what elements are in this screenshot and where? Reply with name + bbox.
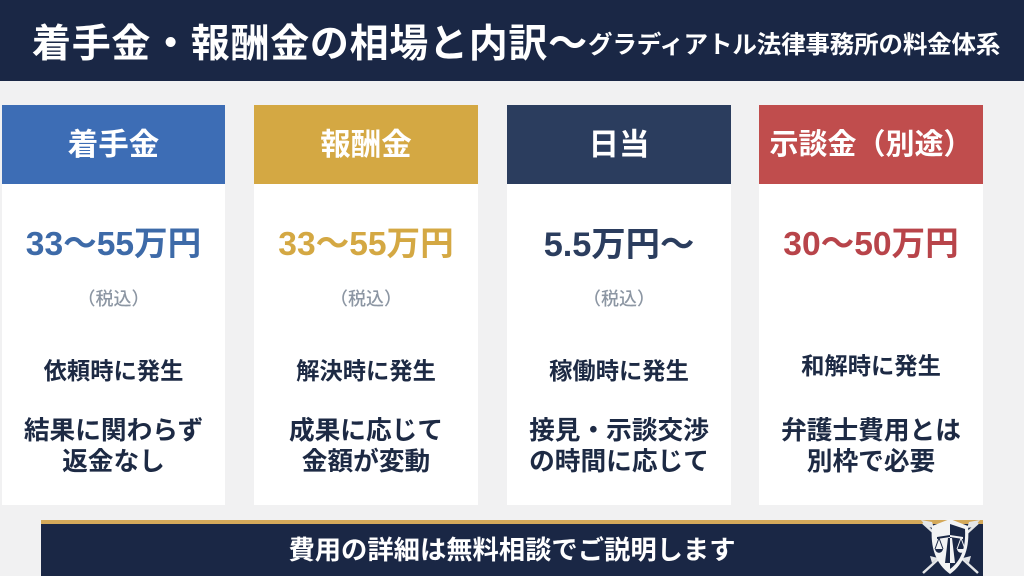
timing: 和解時に発生 <box>801 353 941 379</box>
description: 金額が変動 <box>302 448 430 476</box>
description <box>289 416 443 476</box>
description: の時間に応じて <box>529 448 709 476</box>
description <box>529 417 709 476</box>
tax note: （税込） <box>330 289 402 309</box>
description: 接見・示談交渉 <box>529 417 709 445</box>
heading: 着手金: 着手金 <box>68 128 159 162</box>
footer text: 費用の詳細は無料相談でご説明します <box>288 535 736 565</box>
description: 返金なし <box>62 448 165 476</box>
subtitle: グラディアトル法律事務所の料金体系 <box>588 32 1000 59</box>
heading: 報酬金 <box>254 105 478 184</box>
description <box>781 416 961 476</box>
tax note: （税込） <box>583 289 655 309</box>
price: 日当: 5.5万円〜 <box>544 226 694 264</box>
description: 弁護士費用とは <box>781 417 961 445</box>
price: 着手金: 33〜55万円 <box>26 226 201 263</box>
price: 報酬金: 33〜55万円 <box>278 226 454 263</box>
title: 着手金・報酬金の相場と内訳〜 <box>32 23 588 66</box>
panel: 日当 <box>507 105 731 505</box>
description: 結果に関わらず <box>24 417 203 445</box>
heading: 日当: 日当 <box>588 128 650 162</box>
heading: 日当 <box>507 105 731 184</box>
timing: 解決時に発生 <box>296 358 436 384</box>
timing: 稼働時に発生 <box>549 358 689 384</box>
heading: 着手金 <box>2 105 225 184</box>
heading: 示談金（別途）: 示談金（別途） <box>769 129 972 161</box>
price: 示談金: 30〜50万円 <box>783 226 959 263</box>
timing: 依頼時に発生 <box>44 358 183 384</box>
title banner <box>0 0 1024 81</box>
icon: shield with scales <box>921 520 980 574</box>
heading: 示談金（別途） <box>759 105 983 184</box>
description: 別枠で必要 <box>807 448 935 476</box>
description: 成果に応じて <box>289 417 443 445</box>
panel: 着手金 <box>2 105 225 505</box>
heading: 報酬金: 報酬金 <box>320 128 412 162</box>
footer bar <box>41 520 983 576</box>
panel: 報酬金 <box>254 105 478 505</box>
panel: 示談金 <box>759 105 983 505</box>
description <box>24 417 203 476</box>
tax note: （税込） <box>78 289 150 309</box>
